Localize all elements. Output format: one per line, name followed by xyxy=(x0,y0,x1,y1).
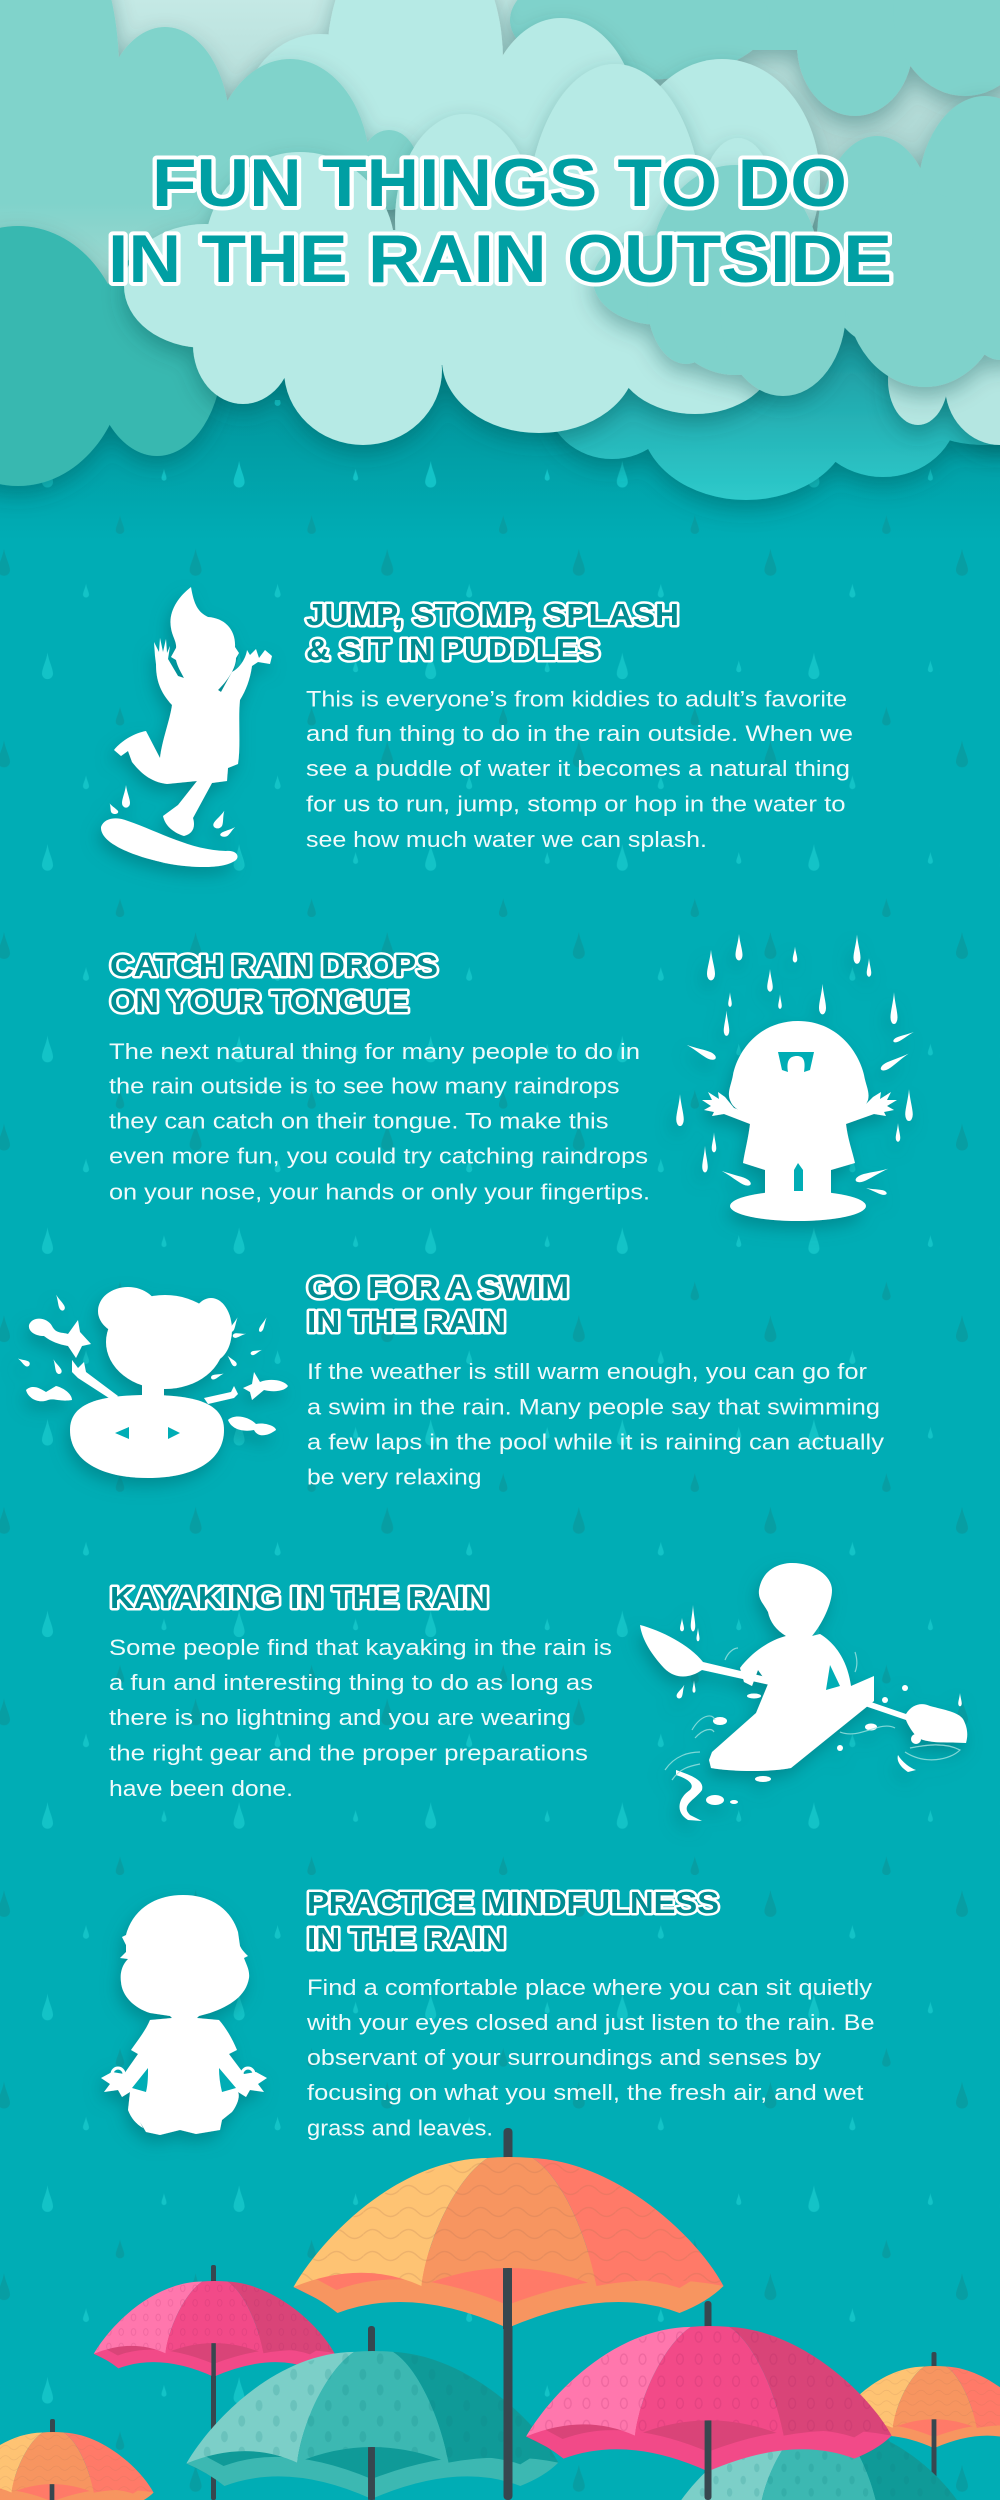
umbrellas xyxy=(0,2128,1000,2500)
heading: KAYAKING IN THE RAIN xyxy=(110,1580,489,1615)
body text xyxy=(306,1975,874,2140)
body text: for us to run, jump, stomp or hop in the water to xyxy=(306,792,846,816)
body text: the right gear and the proper preparations xyxy=(109,1740,588,1766)
body text: they can catch on their tongue. To make this xyxy=(109,1108,608,1134)
body text: focusing on what you smell, the fresh air, and wet xyxy=(307,2080,864,2105)
body text: be very relaxing xyxy=(307,1464,482,1490)
icon: child swimming in a ring xyxy=(17,1287,288,1478)
icon: child meditating xyxy=(101,1895,267,2135)
heading xyxy=(307,1885,719,1956)
body text: there is no lightning and you are wearing xyxy=(109,1705,571,1730)
body text: have been done. xyxy=(109,1776,293,1801)
heading: JUMP, STOMP, SPLASH xyxy=(306,597,679,632)
panel: catch rain drops xyxy=(109,934,915,1221)
panel: practice mindfulness xyxy=(101,1885,874,2140)
heading xyxy=(110,948,438,1019)
body text: The next natural thing for many people to do in xyxy=(109,1039,640,1064)
icon: child jumping in a puddle xyxy=(101,587,272,867)
body text: Some people find that kayaking in the rain is xyxy=(109,1635,612,1660)
heading: ON YOUR TONGUE xyxy=(110,984,409,1019)
body text: If the weather is still warm enough, you can go for xyxy=(307,1359,867,1384)
body text xyxy=(306,686,853,852)
panel: go for a swim xyxy=(17,1270,884,1490)
icon: child catching raindrops on tongue xyxy=(676,934,915,1221)
umbrella: large orange xyxy=(294,2128,724,2500)
body text: a few laps in the pool while it is raining can actually xyxy=(307,1430,884,1454)
umbrella: teal lower right xyxy=(672,2425,965,2500)
panel: kayaking xyxy=(109,1563,967,1821)
panel: jump, stomp, splash xyxy=(101,587,853,867)
umbrella: orange left xyxy=(0,2419,154,2500)
umbrella: teal xyxy=(186,2326,558,2500)
body text: Find a comfortable place where you can sit quietly xyxy=(307,1975,872,2000)
body text: This is everyone’s from kiddies to adult’s favorite xyxy=(306,686,847,712)
umbrella: pink left xyxy=(94,2265,335,2500)
body text: and fun thing to do in the rain outside. When we xyxy=(306,721,853,746)
heading: CATCH RAIN DROPS xyxy=(110,948,438,983)
heading: GO FOR A SWIM xyxy=(307,1270,569,1305)
heading: IN THE RAIN xyxy=(307,1921,506,1956)
clouds xyxy=(0,0,1000,500)
umbrella: orange right xyxy=(831,2352,1000,2500)
title: IN THE RAIN OUTSIDE xyxy=(108,221,892,297)
icon: child kayaking xyxy=(640,1563,967,1821)
heading: IN THE RAIN xyxy=(307,1304,506,1339)
body text: see how much water we can splash. xyxy=(306,827,707,852)
body text: even more fun, you could try catching raindrops xyxy=(109,1144,648,1168)
body text: grass and leaves. xyxy=(307,2116,493,2140)
body text: observant of your surroundings and senses by xyxy=(307,2045,821,2070)
heading: PRACTICE MINDFULNESS xyxy=(307,1885,719,1920)
umbrella: pink right xyxy=(526,2301,892,2500)
body text xyxy=(109,1039,650,1204)
body text: a swim in the rain. Many people say that swimming xyxy=(307,1394,880,1420)
heading xyxy=(306,597,679,667)
title: FUN THINGS TO DO xyxy=(152,145,847,221)
body text: with your eyes closed and just listen to the rain. Be xyxy=(306,2010,874,2035)
body text: a fun and interesting thing to do as long as xyxy=(109,1670,593,1695)
title xyxy=(108,145,892,297)
body text xyxy=(307,1359,884,1490)
heading xyxy=(307,1270,569,1339)
body text: see a puddle of water it becomes a natural thing xyxy=(306,756,850,781)
body text xyxy=(109,1635,612,1801)
heading: & SIT IN PUDDLES xyxy=(306,632,600,667)
body text: the rain outside is to see how many raindrops xyxy=(109,1074,620,1098)
body text: on your nose, your hands or only your fingertips. xyxy=(109,1180,650,1204)
